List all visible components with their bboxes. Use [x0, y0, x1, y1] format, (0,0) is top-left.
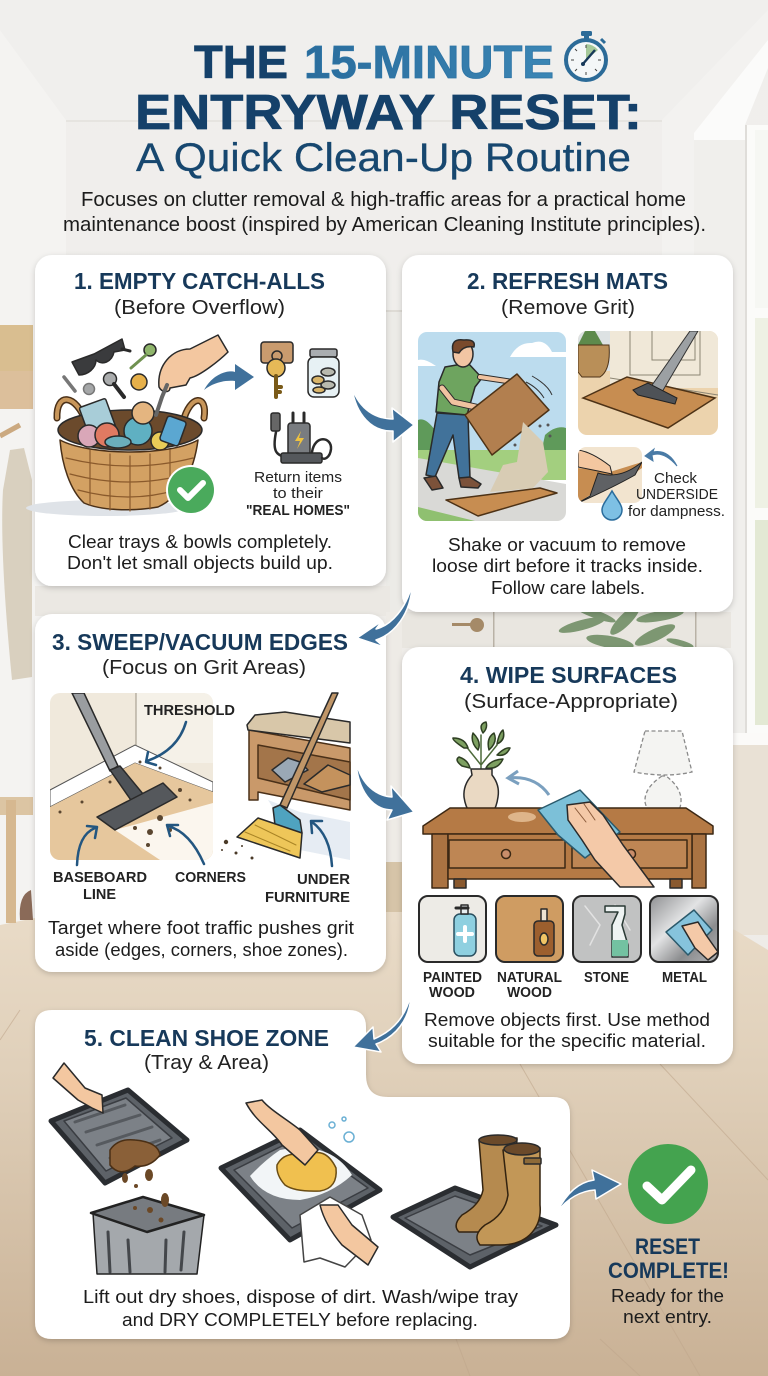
intro text: Focuses on clutter removal & high-traffic areas for a practical home — [81, 189, 686, 211]
body text 3: aside (edges, corners, shoe zones). — [55, 940, 348, 960]
labels: grit areas: UNDER — [297, 872, 351, 888]
callout: reset complete — [608, 1144, 729, 1327]
label: check underside — [628, 471, 725, 520]
illustration: man shaking mat outdoors — [418, 332, 566, 521]
callout: reset complete: Ready for the — [611, 1286, 724, 1306]
icon: wicker basket with items — [26, 398, 205, 516]
body text 4 — [424, 1010, 710, 1051]
body text 5: Lift out dry shoes, dispose of dirt. Wash/wipe tray — [83, 1287, 518, 1307]
illustration: bench and broom — [221, 693, 350, 860]
labels: materials: WOOD — [429, 985, 475, 1001]
labels: materials: PAINTED — [423, 970, 482, 986]
label: return items: Return items — [254, 470, 342, 486]
arrow: step 1 to 2 — [352, 388, 414, 442]
arrow: step 3 to 4 — [356, 762, 414, 820]
body text 4: suitable for the specific material. — [428, 1031, 706, 1051]
arrow: check underside — [645, 449, 677, 466]
label: return items: to their — [273, 486, 323, 502]
labels: materials — [423, 970, 707, 1001]
labels: grit areas: BASEBOARD — [53, 870, 147, 886]
illustration: dashed lamp — [634, 731, 692, 817]
labels: materials: NATURAL — [497, 970, 562, 986]
arrows: callout pointers — [77, 722, 332, 866]
labels: materials: STONE — [584, 970, 629, 986]
body text 4: Remove objects first. Use method — [424, 1010, 710, 1030]
label: return items — [246, 470, 350, 519]
label: check underside: UNDERSIDE — [636, 487, 718, 503]
title: ENTRYWAY RESET: — [135, 86, 642, 140]
body text 1: Clear trays & bowls completely. — [68, 532, 332, 552]
plant behind panels — [558, 602, 694, 652]
callout: reset complete: next entry. — [623, 1307, 712, 1327]
illustration: vacuuming mat — [578, 331, 718, 435]
label: check underside: Check — [654, 471, 698, 487]
window — [733, 125, 768, 935]
heading 5: 5. CLEAN SHOE ZONE — [84, 1025, 329, 1051]
label: return items: "REAL HOMES" — [246, 503, 350, 519]
tile: stone — [573, 896, 641, 962]
illustration: boots on tray — [393, 1135, 556, 1267]
body text 2: Shake or vacuum to remove — [448, 535, 686, 555]
panel: 2 refresh mats — [402, 255, 733, 612]
title — [135, 31, 642, 180]
body text 3: Target where foot traffic pushes grit — [48, 918, 354, 938]
panel: 1 empty catch-alls — [26, 255, 386, 586]
title: THE — [194, 36, 288, 88]
icon: large green check — [628, 1144, 708, 1224]
body text 5 — [83, 1287, 518, 1330]
icon: key on hook — [261, 342, 293, 397]
intro text: maintenance boost (inspired by American Cleaning Institute principles). — [63, 214, 706, 236]
labels: grit areas: FURNITURE — [265, 890, 350, 906]
callout: reset complete: RESET — [635, 1234, 700, 1259]
subheading 5: (Tray & Area) — [144, 1052, 269, 1074]
illustration: vacuum along baseboard — [50, 693, 213, 860]
arrow: to reset complete — [557, 1170, 621, 1212]
left wall shelf, basket and coat — [0, 325, 33, 923]
tile: metal — [650, 896, 718, 962]
labels: grit areas: CORNERS — [175, 870, 246, 886]
labels: materials: METAL — [662, 970, 707, 986]
door handle — [452, 618, 484, 632]
intro text — [63, 189, 706, 236]
labels: grit areas — [53, 703, 351, 906]
illustration: vase with plant — [453, 722, 510, 817]
panel: 3 sweep and vacuum edges — [35, 614, 386, 972]
label: check underside: for dampness. — [628, 504, 725, 520]
subheading 2: (Remove Grit) — [501, 297, 635, 319]
arrow: to real homes — [204, 364, 254, 390]
arrow: move object — [508, 771, 549, 795]
labels: materials: WOOD — [507, 985, 552, 1001]
callout: reset complete: COMPLETE! — [608, 1258, 729, 1283]
tile: natural wood — [496, 896, 563, 962]
heading 1: 1. EMPTY CATCH-ALLS — [74, 268, 325, 294]
labels: grit areas: THRESHOLD — [144, 703, 235, 719]
body text 2: Follow care labels. — [491, 578, 645, 598]
subheading 1: (Before Overflow) — [114, 297, 285, 319]
title: A Quick Clean-Up Routine — [136, 136, 631, 180]
arrow: step 4 to 5 — [353, 995, 411, 1052]
illustration: sponge washing tray — [221, 1100, 380, 1267]
panel: 5 clean shoe zone — [35, 1010, 570, 1339]
body text 1 — [67, 532, 333, 573]
icon: hand picking — [156, 335, 228, 415]
icon: flying small objects — [64, 339, 156, 397]
icon: green check — [166, 465, 216, 515]
illustration: checking mat underside — [578, 447, 642, 503]
tile: painted wood — [419, 896, 486, 962]
icon: stopwatch — [566, 31, 606, 80]
material tiles — [419, 896, 718, 962]
body text 3 — [48, 918, 354, 960]
icon: coin jar — [308, 349, 339, 397]
illustration: hand wiping with cloth — [538, 790, 654, 887]
illustration: tray dumped into bin — [51, 1063, 204, 1274]
subheading 3: (Focus on Grit Areas) — [102, 657, 306, 679]
body text 2 — [432, 535, 703, 598]
title: 15-MINUTE — [304, 36, 554, 88]
heading 3: 3. SWEEP/VACUUM EDGES — [52, 629, 348, 655]
icon: charger — [271, 413, 331, 463]
arrow: step 2 to 3 — [357, 585, 412, 647]
subheading 4: (Surface-Appropriate) — [464, 691, 678, 713]
heading 4: 4. WIPE SURFACES — [460, 662, 677, 688]
panel: 4 wipe surfaces — [402, 647, 733, 1064]
illustration: wooden console table — [423, 808, 713, 888]
icon: water drop — [602, 491, 622, 520]
body text 2: loose dirt before it tracks inside. — [432, 556, 703, 576]
body text 1: Don't let small objects build up. — [67, 553, 333, 573]
heading 2: 2. REFRESH MATS — [467, 268, 668, 294]
labels: grit areas: LINE — [83, 887, 116, 903]
body text 5: and DRY COMPLETELY before replacing. — [122, 1310, 478, 1330]
